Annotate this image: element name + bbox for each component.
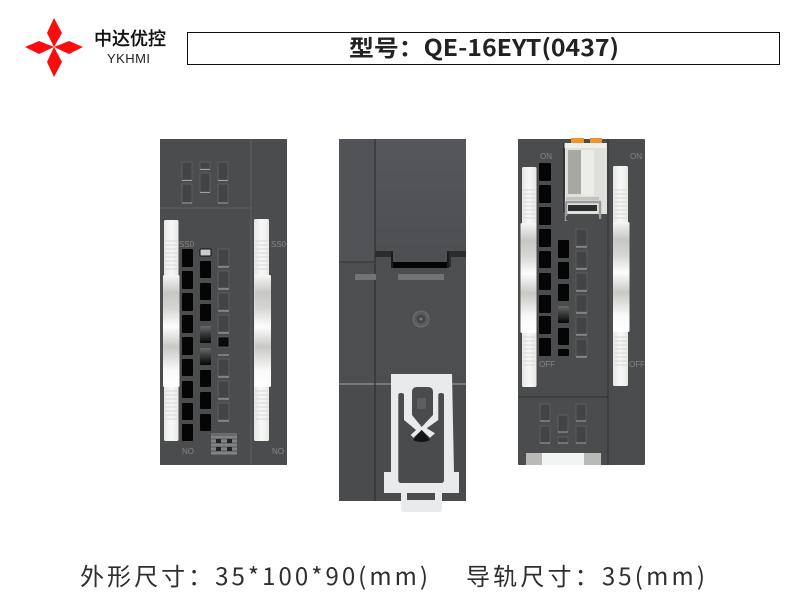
title: 型号：QE-16EYT(0437) bbox=[349, 29, 619, 63]
title box bbox=[188, 29, 780, 64]
panel: front view module bbox=[160, 139, 287, 465]
logo latin name: YKHMI bbox=[107, 51, 150, 66]
top connector bbox=[563, 143, 607, 221]
black terminal column 2 bbox=[558, 240, 569, 356]
rear labels: ON bbox=[630, 152, 642, 161]
indicator column 3 bbox=[576, 229, 587, 356]
slider: right bbox=[613, 166, 630, 386]
rear labels: OFF bbox=[539, 360, 555, 369]
front labels: NO bbox=[182, 447, 194, 456]
connector pins bbox=[211, 433, 237, 455]
orange latch bbox=[571, 138, 602, 143]
icon: red four-diamond mark bbox=[25, 18, 83, 77]
logo bbox=[25, 18, 166, 77]
panel: side view module bbox=[339, 139, 466, 512]
front labels: SS0 bbox=[179, 240, 195, 249]
DIN rail clip bbox=[384, 374, 459, 512]
bottom latch bbox=[526, 453, 601, 465]
front labels bbox=[179, 240, 287, 456]
black terminal column 1 bbox=[539, 163, 551, 356]
black notch bbox=[375, 251, 466, 267]
screw bbox=[413, 311, 429, 327]
slider: right bbox=[254, 219, 271, 441]
logo wordmark: 中达优控 bbox=[94, 25, 166, 51]
rear labels: ON bbox=[540, 152, 552, 161]
clip hook block bbox=[417, 398, 426, 409]
panel: rear view module bbox=[518, 138, 645, 465]
seam bbox=[339, 383, 466, 385]
front labels: NO bbox=[272, 447, 284, 456]
slider: left bbox=[520, 167, 536, 387]
rear labels: OFF bbox=[629, 360, 645, 369]
dimensions caption: 外形尺寸：35*100*90(mm) bbox=[80, 557, 428, 592]
black terminal column 2 bbox=[200, 249, 211, 431]
front labels: SS0 bbox=[271, 240, 287, 249]
black terminal column 1 bbox=[182, 249, 193, 441]
top lid bbox=[375, 139, 466, 251]
slider: left bbox=[163, 220, 180, 441]
indicator column 3 bbox=[218, 249, 229, 420]
slots bbox=[355, 274, 376, 280]
clip dark catch bbox=[413, 430, 430, 442]
rear labels bbox=[539, 152, 645, 369]
bottom vent windows bbox=[540, 404, 586, 443]
rail size caption: 导轨尺寸：35(mm) bbox=[466, 557, 705, 592]
top vent windows bbox=[182, 162, 228, 203]
